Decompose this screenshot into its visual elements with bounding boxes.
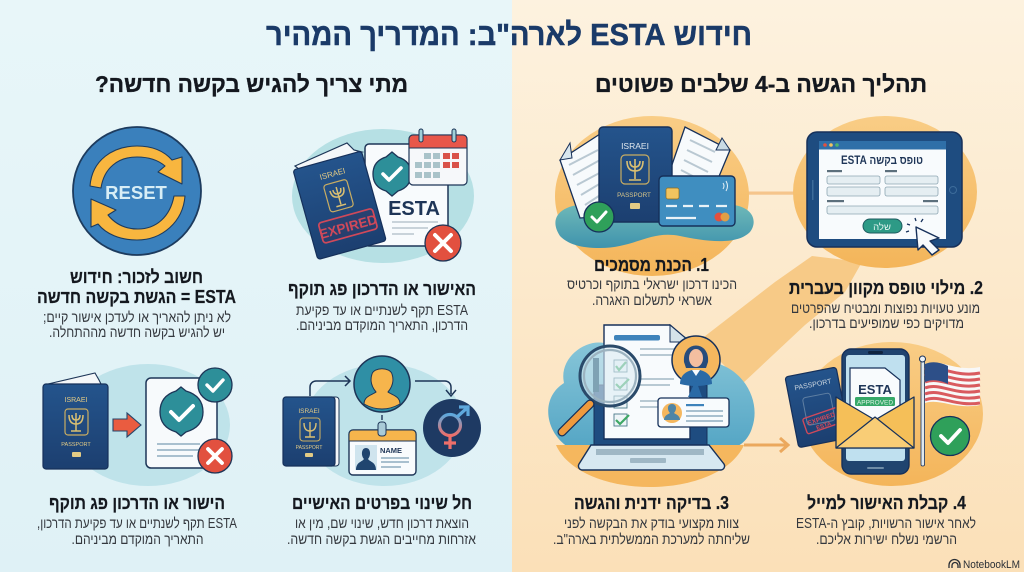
icon: personal details: ISRAEI	[298, 408, 320, 415]
icon: approval email, flag, passport: ESTA	[816, 421, 833, 432]
card heading: חל שינוי בפרטים האישיים	[292, 493, 472, 513]
step text: הכינו דרכון ישראלי בתוקף וכרטיס	[567, 276, 737, 293]
step text: מונע טעויות נפוצות ומבטיח שהפרטים	[791, 301, 980, 317]
icon: passport to document: ISRAEI	[65, 397, 88, 404]
icon: personal details	[283, 356, 481, 486]
icon: expired passport and ESTA: ESTA	[388, 198, 440, 220]
reminder text: יש להגיש בקשה חדשה מההתחלה.	[49, 324, 225, 341]
arrow: step 3 to 4	[744, 438, 788, 452]
card text	[37, 515, 237, 548]
panel: passport expired second card	[37, 364, 237, 548]
arrow: band step 2 to 3	[700, 256, 862, 384]
panel: right background	[512, 0, 1024, 572]
icon: approval email, flag, passport: PASSPORT	[794, 378, 833, 392]
title: חידוש ESTA לארה"ב: המדריך המהיר	[266, 17, 752, 52]
icon: expired passport and ESTA: ISRAEI	[319, 166, 346, 182]
icon: expired passport and ESTA	[292, 129, 474, 263]
icon: documents, passport, credit card: ISRAEI	[621, 141, 649, 151]
card text: אזרחות מחייבים הגשת בקשה חדשה.	[287, 532, 476, 548]
icon: documents, passport, credit card: PASSPORT	[617, 192, 651, 199]
reminder text	[43, 309, 231, 341]
icon: personal details: PASSPORT	[296, 445, 322, 451]
heading: when to apply: מתי צריך להגיש בקשה חדשה?	[95, 71, 408, 97]
card heading: הישור או הדרכון פג תוקף	[49, 493, 225, 513]
icon: tablet with online form	[793, 116, 977, 268]
step text: אשראי לתשלום האגרה.	[592, 292, 712, 309]
icon: reset	[73, 127, 201, 255]
panel: step 4	[785, 342, 983, 548]
icon: expired passport and ESTA: EXPIRED	[318, 212, 379, 242]
panel: left background	[0, 0, 512, 572]
card text: הדרכון, התאריך המוקדם מביניהם.	[296, 318, 468, 334]
icon: documents, passport, credit card	[555, 116, 754, 276]
reminder text: לא ניתן להאריך או לעדכן אישור קיים;	[43, 309, 231, 326]
step text	[567, 276, 737, 309]
step text: מדויקים כפי שמופיעים בדרכון.	[809, 316, 964, 332]
icon: approval email, flag, passport: EXPIRED	[807, 411, 836, 427]
card heading: האישור או הדרכון פג תוקף	[288, 279, 476, 299]
panel: expired approval or passport	[288, 129, 476, 334]
reminder heading: ESTA = הגשת בקשה חדשה	[37, 287, 236, 307]
step heading: 2. מילוי טופס מקוון בעברית	[789, 278, 983, 298]
icon: passport to document: PASSPORT	[61, 442, 91, 448]
step text	[553, 515, 750, 548]
card text: התאריך המוקדם מביניהם.	[72, 532, 204, 548]
panel: personal details changed	[283, 356, 481, 548]
card text: הוצאת דרכון חדש, שינוי שם, מין או	[295, 516, 469, 532]
step text	[796, 515, 976, 548]
icon: reset: RESET	[105, 182, 168, 203]
step heading: 3. בדיקה ידנית והגשה	[574, 493, 729, 513]
icon: approval email, flag, passport	[785, 342, 983, 486]
step text: הרשמי נשלח ישירות אליכם.	[816, 531, 957, 548]
panel: step 3	[548, 325, 755, 548]
panel: step 1	[555, 116, 754, 309]
panel: step 2	[789, 116, 983, 332]
card text	[296, 302, 468, 334]
icon: personal details: NAME	[380, 446, 402, 455]
step text: שליחתה למערכת הממשלתית בארה"ב.	[553, 531, 750, 548]
step text	[791, 301, 980, 332]
reminder heading	[37, 267, 236, 307]
icon: approval email, flag, passport: APPROVED	[857, 400, 893, 406]
card text: ESTA תקף לשנתיים או עד פקיעת	[296, 302, 468, 319]
icon: approval email, flag, passport: ESTA	[858, 382, 892, 397]
panel: reset reminder	[37, 127, 236, 341]
step text: לאחר אישור הרשויות, קובץ ה-ESTA	[796, 515, 976, 532]
icon: manual review on laptop	[548, 325, 755, 487]
icon: tablet with online form: שלה	[873, 221, 891, 233]
arrow: connector step 1 to 2	[745, 192, 797, 195]
step heading: 1. הכנת מסמכים	[594, 255, 709, 275]
heading: process: תהליך הגשה ב-4 שלבים פשוטים	[595, 71, 927, 97]
card text	[287, 516, 476, 548]
step text: צוות מקצועי בודק את הבקשה לפני	[564, 515, 739, 532]
card text: ESTA תקף לשנתיים או עד פקיעת הדרכון,	[37, 515, 237, 532]
logo: NotebookLM: NotebookLM	[963, 559, 1020, 571]
icon: passport to document	[43, 364, 232, 486]
icon: tablet with online form: טופס בקשה ESTA	[841, 155, 923, 167]
step heading: 4. קבלת האישור למייל	[807, 493, 966, 513]
reminder heading: חשוב לזכור: חידוש	[70, 267, 203, 287]
